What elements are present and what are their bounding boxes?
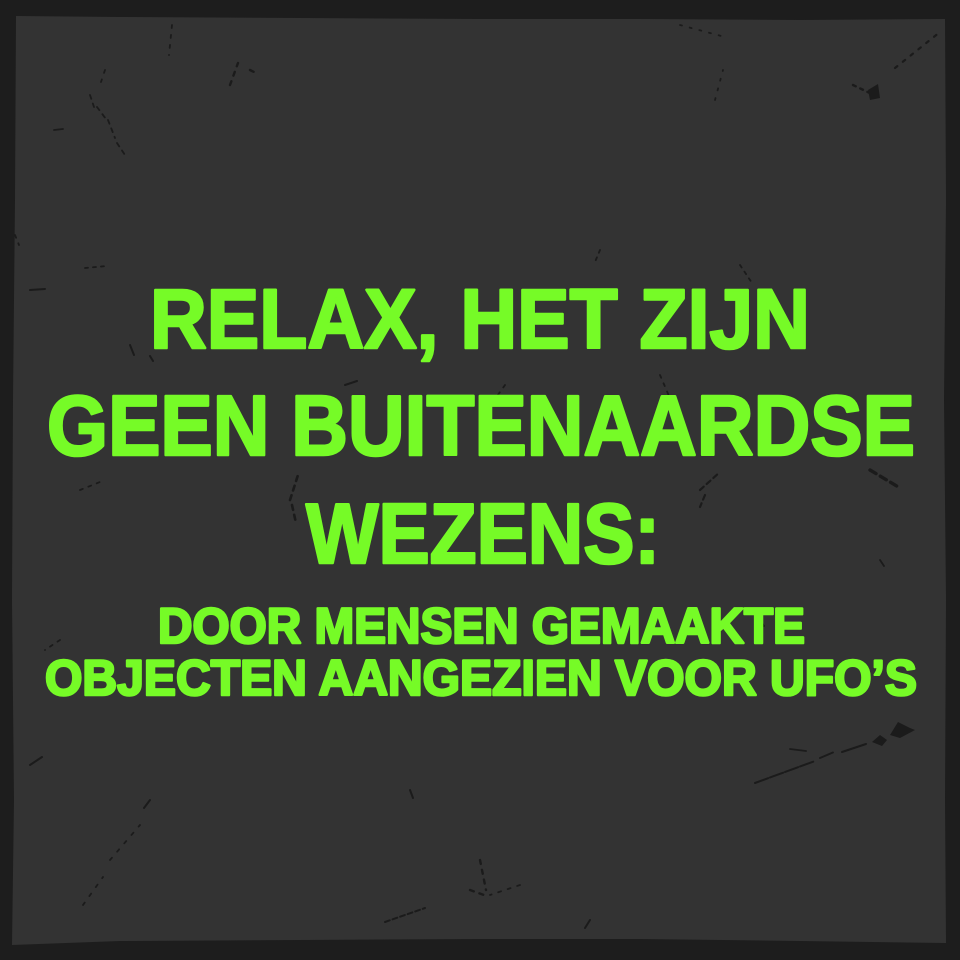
title line 3: WEZENS:: [306, 487, 660, 582]
title line 1: RELAX, HET ZIJN: [150, 272, 810, 366]
subtitle: [45, 598, 917, 706]
title line 2: GEEN BUITENAARDSE: [47, 379, 915, 474]
subtitle line 1: DOOR MENSEN GEMAAKTE: [158, 598, 805, 654]
subtitle line 2: OBJECTEN AANGEZIEN VOOR UFO’S: [45, 650, 917, 706]
title: [47, 272, 915, 582]
